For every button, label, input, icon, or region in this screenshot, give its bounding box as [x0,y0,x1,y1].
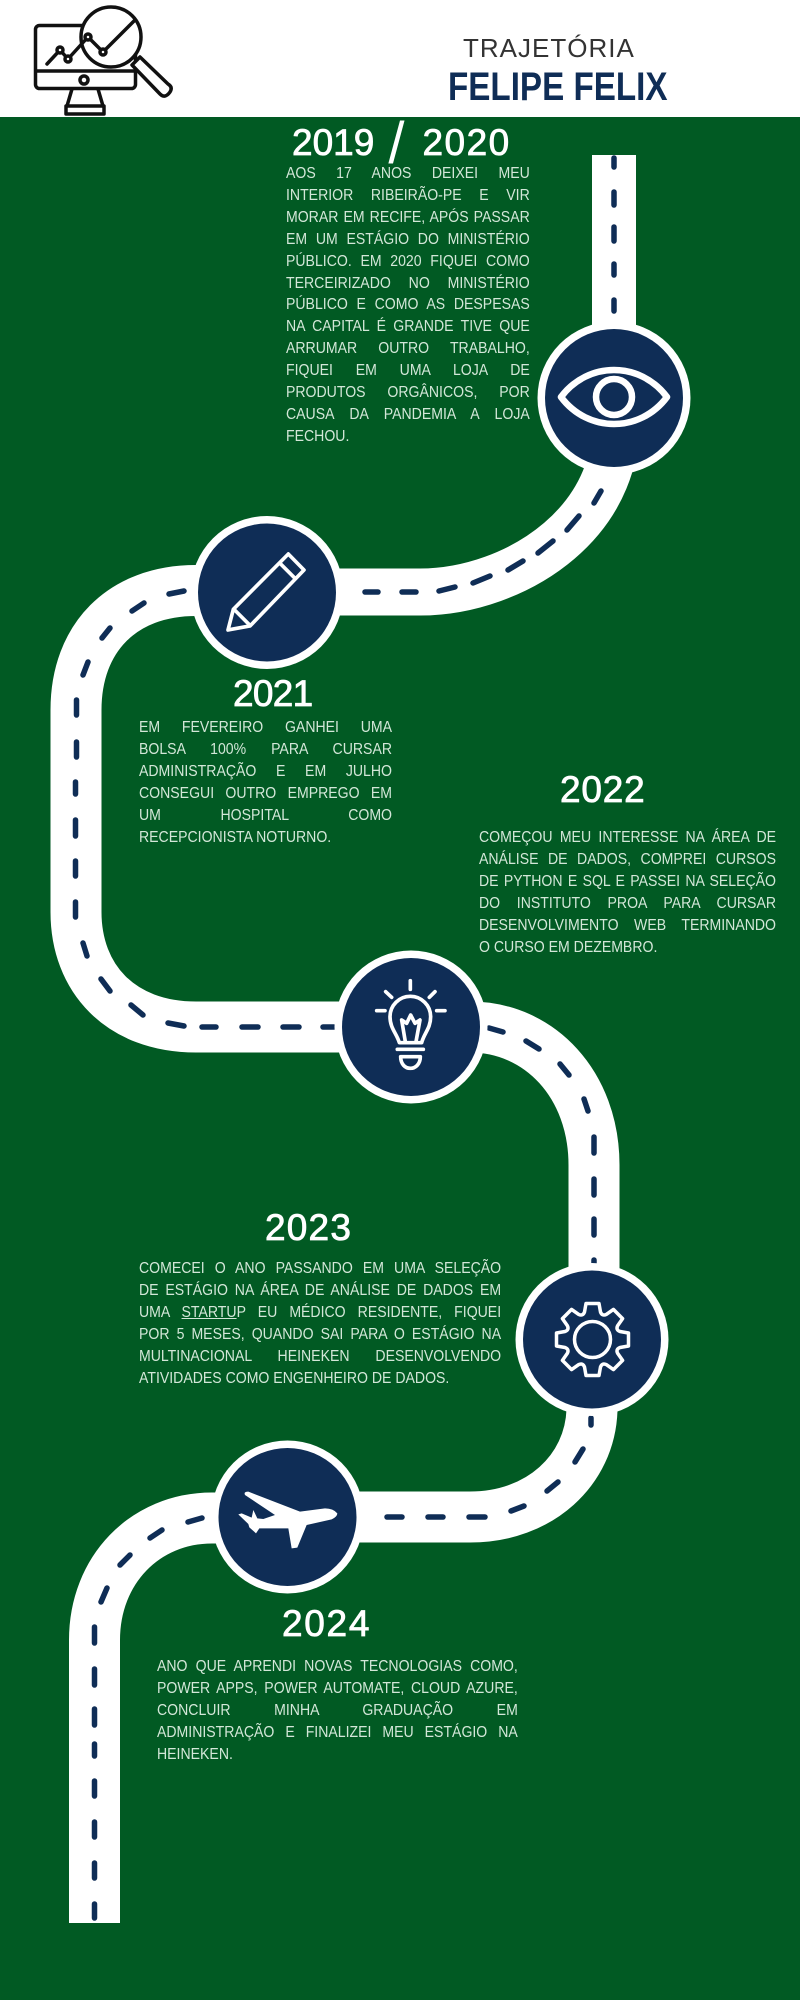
year: 2024: 2024 [282,1603,371,1644]
icon: gear [556,1304,628,1376]
icon: monitor with magnifier [36,7,171,114]
milestone: eye [538,322,690,474]
text: 2022: COMEÇOU MEU INTERESSE NA ÁREA DE [479,829,776,846]
text: 2019 / 2020: CAUSA DA PANDEMIA A LOJA [286,406,530,423]
text: 2023: DE ESTÁGIO NA ÁREA DE ANÁLISE DE DADOS EM [139,1282,501,1299]
text: 2023: COMECEI O ANO PASSANDO EM UMA SELEÇÃO [139,1260,501,1277]
year: 2022: 2022 [560,769,646,810]
year: 2021: 2021 [233,673,313,714]
text: 2024: ANO QUE APRENDI NOVAS TECNOLOGIAS COMO, [157,1658,518,1675]
road centre dashes [76,158,614,1918]
text: 2021: EM FEVEREIRO GANHEI UMA [139,719,392,736]
milestone: airplane [211,1440,364,1594]
year: 2019 / 2020: 2019/ 2020 [292,111,511,176]
text: 2019 / 2020 [286,165,530,445]
text: 2019 / 2020: TERCEIRIZADO NO MINISTÉRIO [286,275,530,292]
text: 2022 [479,828,776,956]
text: 2024: CONCLUIR MINHA GRADUAÇÃO EM [157,1702,518,1719]
icon: eye [561,370,667,424]
text: 2023 [139,1259,502,1387]
text: 2019 / 2020: FIQUEI EM UMA LOJA DE [286,362,530,379]
header band [0,0,800,117]
text: 2022: DO INSTITUTO PROA PARA CURSAR [479,895,776,912]
text: 2023: UMA STARTUP EU MÉDICO RESIDENTE, FIQUEI [139,1304,501,1321]
title: name: FELIPE FELIX [448,65,668,109]
text: 2021: RECEPCIONISTA NOTURNO. [139,829,331,846]
text: 2023: ATIVIDADES COMO ENGENHEIRO DE DADOS. [139,1370,449,1387]
text: 2019 / 2020: PRODUTOS ORGÂNICOS, POR [286,384,530,401]
text: 2021: BOLSA 100% PARA CURSAR [139,741,392,758]
text: 2021: UM HOSPITAL COMO [139,807,392,824]
icon: airplane [238,1492,337,1548]
text: 2021: ADMINISTRAÇÃO E EM JULHO [139,763,392,780]
text: 2019 / 2020: MORAR EM RECIFE, APÓS PASSAR [286,209,530,226]
title: trajetoria: TRAJETÓRIA [463,33,635,63]
text: 2023: POR 5 MESES, QUANDO SAI PARA O ESTÁGIO NA [139,1326,501,1343]
milestone: gear [516,1263,668,1416]
text: 2024 [157,1658,518,1763]
text: 2024: POWER APPS, POWER AUTOMATE, CLOUD AZURE, [157,1680,518,1697]
text: 2019 / 2020: AOS 17 ANOS DEIXEI MEU [286,165,530,182]
text: 2019 / 2020: ARRUMAR OUTRO TRABALHO, [286,340,530,357]
milestone: pencil [190,516,344,669]
text: 2024: ADMINISTRAÇÃO E FINALIZEI MEU ESTÁGIO NA [157,1724,518,1741]
road [76,155,636,1923]
year: 2023: 2023 [265,1207,352,1248]
text: 2022: O CURSO EM DEZEMBRO. [479,939,657,956]
text: 2022: DESENVOLVIMENTO WEB TERMINANDO [479,917,776,934]
text: 2022: ANÁLISE DE DADOS, COMPREI CURSOS [479,851,776,868]
text: 2019 / 2020: FECHOU. [286,428,349,445]
text: 2024: HEINEKEN. [157,1746,233,1763]
text: 2021: CONSEGUI OUTRO EMPREGO EM [139,785,392,802]
icon: light bulb [377,981,445,1068]
milestone: light bulb [334,950,488,1104]
text: 2019 / 2020: EM UM ESTÁGIO DO MINISTÉRIO [286,231,530,248]
text: 2019 / 2020: NA CAPITAL É GRANDE TIVE QUE [286,318,530,335]
text: 2023: MULTINACIONAL HEINEKEN DESENVOLVENDO [139,1348,501,1365]
text: 2019 / 2020: PÚBLICO. EM 2020 FIQUEI COMO [286,253,530,270]
text: 2019 / 2020: INTERIOR RIBEIRÃO-PE E VIR [286,187,530,204]
text: 2021 [139,719,392,846]
icon: pencil [228,554,304,630]
text: 2019 / 2020: PÚBLICO E COMO AS DESPESAS [286,296,530,313]
text: 2022: DE PYTHON E SQL E PASSEI NA SELEÇÃO [479,873,776,890]
